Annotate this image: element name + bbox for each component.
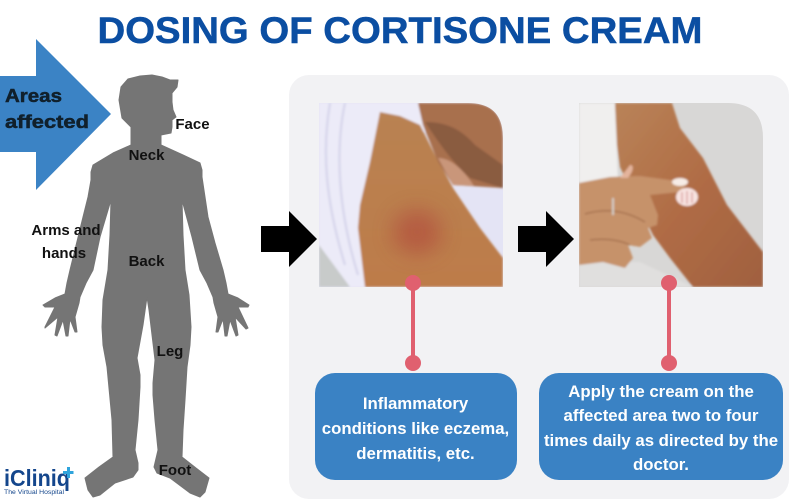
callout text 1: dermatitis, etc. [356,444,475,463]
photo: inflamed skin on arm [319,103,503,287]
arrow label [5,85,89,132]
callout text 2: doctor. [633,455,689,474]
arrow label: Areas [5,85,62,106]
callout text 1: conditions like eczema, [322,419,509,438]
callout: inflammatory conditions [315,373,517,480]
connector: photo 1 to caption 1 [405,275,421,371]
photo: applying cream on arm [579,103,763,287]
body part labels [31,116,210,479]
logo wordmark: iCliniq [4,465,70,491]
callout: application instructions [539,373,783,480]
logo tagline: The Virtual Hospital [4,489,64,496]
arrow: to inflammation photo [261,211,317,267]
panel: treatment steps [289,75,789,499]
arrow label: affected [5,111,89,132]
label: neck: Neck [129,147,165,164]
human body silhouette [43,75,249,497]
callout text 2: Apply the cream on the [568,382,754,401]
logo plus sign [63,467,74,478]
arrow: areas affected [0,39,111,190]
label: face: Face [175,116,210,133]
label: arms and hands: hands [42,245,86,262]
logo: iCliniq [4,465,74,496]
label: arms and hands: Arms and [31,222,101,239]
callout text 2: times daily as directed by the [544,431,778,450]
label: leg: Leg [157,343,183,360]
callout text 2: affected area two to four [564,406,759,425]
arrow: to application photo [518,211,574,267]
callout text 1: Inflammatory [363,394,469,413]
connector: photo 2 to caption 2 [661,275,677,371]
label: foot: Foot [159,462,191,479]
label: back: Back [129,253,165,270]
title: DOSING OF CORTISONE CREAM [98,9,702,51]
